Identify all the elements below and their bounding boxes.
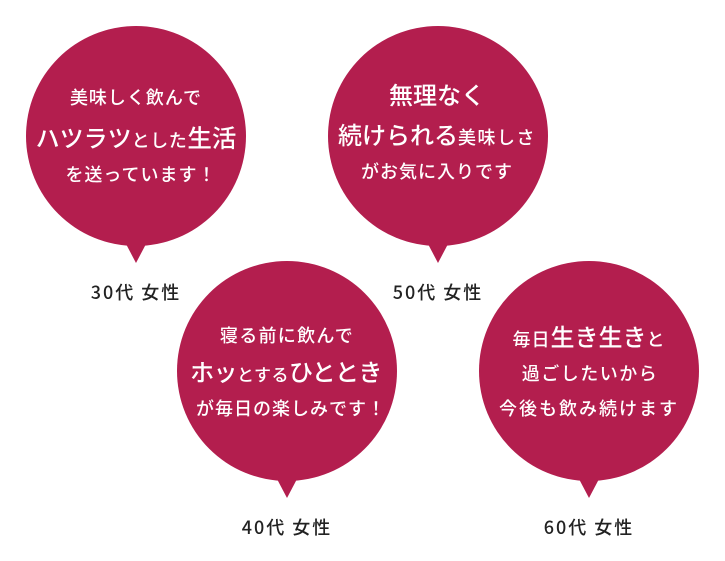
label: 40s woman: 40代 女性 bbox=[242, 514, 332, 540]
speech bubble: 30s woman bbox=[26, 26, 246, 263]
bubble text line 3: 今後も飲み続けます bbox=[499, 395, 679, 421]
bubble shape bbox=[479, 261, 699, 498]
speech bubble: 40s woman bbox=[177, 261, 397, 498]
bubble text line 2: 過ごしたいから bbox=[522, 360, 658, 386]
bubble text line 2: ホッとするひととき bbox=[190, 353, 382, 388]
label: 50s woman: 50代 女性 bbox=[393, 279, 483, 305]
bubble text line 2: ハツラツとした生活 bbox=[36, 119, 236, 155]
bubble text line 1: 無理なく bbox=[389, 76, 485, 111]
bubble text line 1: 美味しく飲んで bbox=[70, 84, 202, 110]
bubble text line 3: がお気に入りです bbox=[361, 158, 513, 184]
bubble text line 2: 続けられる美味しさ bbox=[338, 116, 536, 151]
label: 60s woman: 60代 女性 bbox=[544, 514, 634, 540]
speech bubble: 60s woman bbox=[479, 261, 699, 498]
bubble shape bbox=[26, 26, 246, 263]
bubble text line 3: が毎日の楽しみです！ bbox=[196, 395, 386, 421]
bubble text line 1: 寝る前に飲んで bbox=[220, 322, 354, 348]
bubble shape bbox=[328, 26, 548, 263]
bubble text line 1: 毎日生き生きと bbox=[512, 318, 666, 353]
bubble shape bbox=[177, 261, 397, 498]
speech bubble: 50s woman bbox=[328, 26, 548, 263]
bubble text line 3: を送っています！ bbox=[65, 161, 217, 187]
label: 30s woman: 30代 女性 bbox=[91, 279, 181, 305]
